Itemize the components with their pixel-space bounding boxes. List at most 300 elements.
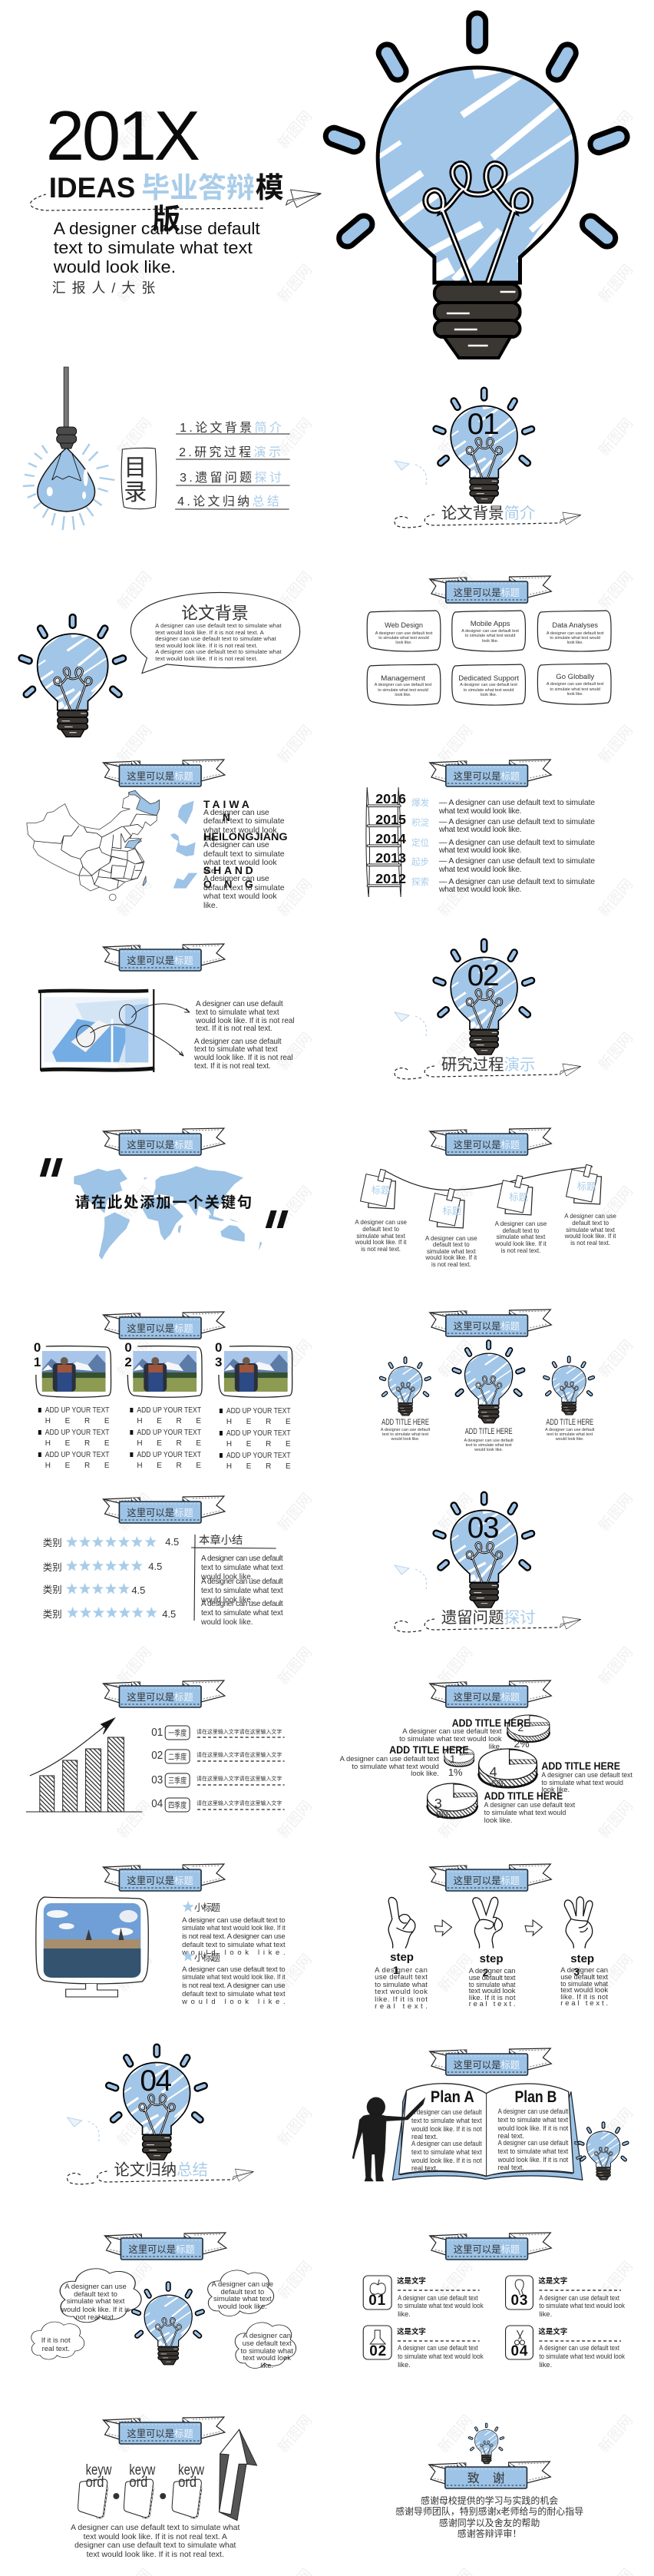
note 4: 标题	[577, 1181, 596, 1192]
icon: tiny bulb	[468, 2423, 504, 2464]
ribbon heading	[430, 576, 551, 603]
ribbon heading	[104, 1864, 225, 1891]
note text 1: A designer can use	[355, 1219, 408, 1226]
plan A text: A designer can use default	[411, 2140, 482, 2148]
region: Shandong: A designer can use	[203, 875, 269, 883]
list column 1: H E R E	[45, 1462, 110, 1470]
step 3: real text.	[560, 1999, 608, 2008]
step 1: A designer can	[375, 1966, 428, 1975]
vertical label box: 目	[124, 455, 147, 481]
rating row 2	[43, 1560, 162, 1573]
bar chart	[26, 1718, 142, 1812]
item 01: like.	[398, 2310, 411, 2319]
arrow 2	[525, 1920, 542, 1935]
step 3: text would look	[560, 1986, 608, 1995]
plan A text: would look like. If it is not	[411, 2157, 482, 2165]
card: dedicated support: look like.	[481, 693, 497, 697]
subheading 1	[183, 1901, 220, 1913]
panel: section 02	[395, 939, 581, 1079]
summary lines	[191, 1535, 276, 1621]
years: 2016	[375, 791, 406, 806]
annotation text 2: would look like. If it is not real	[193, 1054, 293, 1062]
panel: key sentence slide	[40, 1128, 289, 1260]
arrow 1	[434, 1920, 451, 1935]
ribbon heading: 这里可以是标题	[454, 1320, 520, 1332]
bubble text: text would look like. If it is not real text. A	[155, 629, 265, 636]
ribbon heading	[430, 1310, 551, 1336]
card: web design: look like.	[395, 641, 412, 645]
step 2: like. If it is not	[469, 1994, 516, 2002]
item text bottom	[484, 1790, 576, 1825]
annotation text 2: text. If it is not real text.	[194, 1062, 271, 1071]
note 1: 标题	[372, 1185, 390, 1196]
region: Taiwan: TAIWA	[203, 798, 249, 810]
card: management: to simulate what text would	[378, 688, 428, 693]
region: Heilongjiang: HEILONGJIANG	[203, 830, 288, 843]
paragraph 2: simulate what text would look like. If it	[182, 1973, 286, 1982]
years: 2013	[375, 850, 406, 866]
item 02: 02	[369, 2343, 386, 2359]
icon: small bulb	[577, 2122, 629, 2180]
plan B text: A designer can use default	[498, 2139, 569, 2147]
region: Shandong: like.	[203, 902, 218, 910]
panel: pinned notes slide	[355, 1128, 617, 1268]
note text 2: simulate what text	[427, 1248, 476, 1255]
panel: contents slide	[23, 367, 290, 530]
ribbon heading	[429, 2462, 550, 2488]
item text right	[541, 1760, 633, 1794]
thanks text: 感谢同学以及舍友的帮助	[439, 2517, 540, 2528]
photo card 3: 3	[215, 1355, 222, 1369]
subtitle: IDEAS	[49, 172, 135, 204]
list column 1: ADD UP YOUR TEXT	[45, 1451, 109, 1459]
region: Taiwan: what text would look	[203, 826, 277, 835]
item 02: to simulate what text would look	[398, 2353, 484, 2361]
ribbon heading: 这里可以是标题	[127, 1875, 193, 1886]
keyword 2: keyw	[129, 2462, 155, 2478]
photo card 2: 2	[124, 1355, 132, 1369]
photo card 3	[215, 1340, 292, 1397]
section number: 03	[467, 1511, 500, 1545]
contents list: 3.遗留问题探讨	[180, 471, 284, 485]
list column 1: ADD UP YOUR TEXT	[45, 1429, 109, 1437]
decoration: dashed flight path	[395, 461, 581, 528]
plan A text	[411, 2108, 482, 2172]
panel: ratings slide	[43, 1496, 283, 1627]
annotation text 2: text to simulate what text	[194, 1045, 278, 1054]
step 1: like. If it is not	[375, 1995, 428, 2004]
ribbon heading	[104, 1128, 225, 1155]
card: mobile apps	[452, 611, 525, 651]
framed photo	[38, 989, 154, 1072]
note text 3	[494, 1220, 547, 1254]
step 1: 1	[393, 1964, 399, 1976]
legend 03: 03	[151, 1773, 163, 1786]
bubble text: designer can use default text to simulate what	[155, 635, 277, 642]
title year: 201X	[46, 98, 200, 175]
paragraph 1: is not real text. A designer can use	[182, 1932, 286, 1941]
ribbon heading: 这里可以是标题	[454, 1139, 520, 1151]
ribbon heading	[104, 1312, 225, 1339]
cloud 3: simulate what text	[213, 2295, 272, 2303]
list column 1: H E R E	[45, 1439, 110, 1448]
bulb right with text: text to simulate what text	[547, 1432, 593, 1437]
panel: thought clouds slide	[31, 2233, 296, 2370]
note text 1: would look like. If it	[355, 1239, 407, 1246]
section title: 研究过程演示	[441, 1056, 535, 1074]
timeline text: — A designer can use default text to simulate	[439, 818, 595, 826]
card: mobile apps: to simulate what text would	[465, 634, 515, 638]
card: dedicated support: A designer can use default text	[460, 683, 517, 687]
pie 4: 6%	[491, 1778, 506, 1790]
cloud 4: use default text	[243, 2339, 292, 2348]
stage labels	[411, 797, 430, 887]
legend 04: 请在这里输入文字请在这里输入文字	[197, 1800, 282, 1806]
timeline text: what text would look like.	[438, 886, 521, 894]
photo card 1	[34, 1340, 111, 1397]
annotation text 2: A designer can use default	[194, 1038, 282, 1046]
region: Shandong: default text to simulate	[203, 884, 285, 892]
region: Taiwan: like.	[203, 835, 218, 843]
quote mark right	[266, 1210, 289, 1228]
annotation text 2	[193, 1038, 293, 1071]
item 04: to simulate what text would look	[539, 2353, 625, 2361]
legend 01: 一季度	[168, 1728, 187, 1738]
ladder	[366, 787, 401, 897]
cloud 1: A designer can use	[64, 2283, 127, 2291]
list column 2: H E R E	[137, 1462, 201, 1470]
bulb left with text: A designer can use default	[381, 1428, 431, 1432]
big arrow	[220, 2429, 257, 2521]
legend 01: 01	[151, 1726, 163, 1739]
monitor illustration	[36, 1897, 148, 1997]
rating row 1: 4.5	[165, 1536, 179, 1548]
item 04: like.	[539, 2361, 552, 2369]
icon: paper plane	[286, 190, 321, 207]
plan A text: real text.	[411, 2164, 438, 2172]
cloud 1: not real text.	[76, 2313, 116, 2322]
summary text: A designer can use default	[201, 1600, 283, 1608]
summary text: text to simulate what text	[201, 1564, 283, 1572]
keyword 2: ord	[129, 2475, 147, 2491]
ribbon heading	[104, 760, 225, 786]
bubble text: text would look like. If it is not real text.	[155, 655, 258, 662]
ribbon heading	[430, 1128, 551, 1155]
rating row 1: 类别	[43, 1538, 62, 1548]
section number: 04	[140, 2064, 172, 2098]
step 1: to simulate what	[375, 1981, 428, 1989]
summary text: text to simulate what text	[201, 1609, 283, 1617]
bubble heading: 论文背景	[181, 604, 249, 623]
note text 4	[564, 1213, 617, 1247]
subtitle wrapped character: 版	[152, 204, 180, 235]
note text 1: is not real text.	[361, 1246, 401, 1253]
ribbon heading	[430, 2048, 551, 2075]
step 3: use default text	[560, 1973, 608, 1982]
icon: bulb	[105, 2045, 208, 2160]
photo card 2: 0	[124, 1340, 132, 1355]
stage labels: 定位	[411, 837, 430, 848]
rating row 1	[43, 1536, 179, 1548]
item text top: like.	[489, 1743, 502, 1751]
decoration: dashed flight path	[68, 2117, 253, 2184]
item 01: 这是文字	[397, 2276, 426, 2286]
step 1: real text.	[375, 2002, 428, 2011]
keyword text	[71, 2524, 240, 2559]
step 2: to simulate what	[469, 1981, 516, 1989]
rating row 3	[43, 1583, 145, 1596]
step 1: step	[390, 1951, 414, 1964]
panel: plan A and B slide	[352, 2048, 629, 2181]
item 04: 这是文字	[538, 2327, 567, 2336]
plan B text: would look like. If it is not	[497, 2156, 569, 2164]
cloud 2: real text.	[42, 2345, 70, 2353]
legend 01	[151, 1726, 285, 1740]
item 01	[363, 2276, 484, 2319]
item text right: look like.	[541, 1786, 570, 1794]
note 1	[361, 1169, 395, 1209]
timeline text: — A designer can use default text to simulate	[439, 878, 595, 886]
world map	[74, 1166, 262, 1260]
bulb right with text: A designer can use default	[545, 1428, 595, 1432]
ribbon heading: 这里可以是标题	[127, 1507, 193, 1518]
vertical label box: 录	[124, 480, 147, 505]
pie 1: 1	[450, 1753, 456, 1765]
icon: large light bulb	[323, 13, 629, 358]
panel: section 01	[395, 388, 581, 528]
subheading 2: 小标题	[194, 1952, 220, 1963]
legend 04: 四季度	[168, 1800, 187, 1810]
pie 3: 3	[434, 1796, 442, 1811]
section number: 01	[467, 408, 500, 441]
step 2: A designer can	[469, 1967, 516, 1975]
region: Heilongjiang: like.	[203, 867, 218, 876]
rating row 2: 4.5	[148, 1561, 162, 1572]
photo card 1: 0	[34, 1340, 41, 1355]
step 2	[469, 1952, 516, 2008]
pie 4: 4	[490, 1764, 497, 1780]
bulb centre with text: ADD TITLE HERE	[465, 1427, 513, 1436]
summary text: would look like.	[200, 1573, 253, 1581]
cloud 4: like.	[260, 2362, 273, 2370]
timeline text: what text would look like.	[438, 866, 521, 874]
list column 1	[38, 1406, 110, 1470]
annotation text 1	[195, 1000, 295, 1033]
step 2: use default text	[469, 1974, 516, 1982]
legend 02: 二季度	[168, 1752, 187, 1762]
years: 2014	[375, 831, 406, 846]
ribbon heading	[104, 1496, 225, 1523]
step 3: step	[570, 1952, 594, 1965]
description text: A designer can use default	[54, 219, 261, 238]
step 2: step	[480, 1952, 504, 1965]
note text 4: is not real text.	[570, 1240, 610, 1247]
panel: three photos slide	[34, 1312, 292, 1471]
region: Taiwan: default text to simulate	[203, 817, 285, 826]
note 3: 标题	[509, 1192, 528, 1203]
icon: bulb	[18, 614, 127, 737]
card: dedicated support: to simulate what text would	[464, 688, 514, 693]
item 03: to simulate what text would look	[539, 2302, 625, 2310]
list column 2: ADD UP YOUR TEXT	[137, 1406, 201, 1415]
note text 4: simulate what text	[566, 1227, 616, 1233]
bulb right with text	[543, 1356, 595, 1442]
thanks text	[395, 2495, 583, 2539]
pie 2: 2%	[514, 1737, 530, 1750]
list column 3: ADD UP YOUR TEXT	[226, 1429, 291, 1438]
card: data analyses: Data Analyses	[552, 621, 598, 630]
decoration: dashed flight path	[395, 1012, 581, 1079]
bulb right with text: would look like.	[555, 1437, 584, 1442]
cloud 1: default text to	[74, 2290, 117, 2299]
years: 2015	[375, 812, 406, 827]
legend 02	[151, 1749, 285, 1763]
keyword 3: keyw	[178, 2462, 204, 2478]
ribbon heading: 这里可以是标题	[454, 2059, 520, 2071]
timeline text: what text would look like.	[438, 826, 521, 834]
note 2	[429, 1188, 464, 1228]
paragraph 1: default text to simulate what text	[182, 1941, 286, 1949]
item text right: A designer can use default text	[541, 1771, 633, 1780]
bubble text	[155, 622, 282, 662]
list column 1: H E R E	[45, 1417, 110, 1425]
ribbon heading: 这里可以是标题	[127, 2428, 193, 2439]
bubble text: text would look like. If it is not real text.	[155, 642, 258, 649]
summary text: would look like.	[200, 1596, 253, 1604]
ribbon heading: 这里可以是标题	[128, 2243, 195, 2255]
plan B heading: Plan B	[515, 2088, 557, 2106]
item 02: A designer can use default text	[398, 2344, 478, 2353]
description text: text to simulate what text	[54, 238, 253, 257]
cloud 1: would look like. If it is	[61, 2306, 130, 2314]
ribbon heading	[430, 760, 551, 786]
cloud 2: If it is not	[41, 2336, 71, 2345]
keyword 3	[172, 2462, 204, 2518]
item text bottom: A designer can use default text	[484, 1801, 576, 1809]
panel: four icons slide	[363, 2233, 625, 2369]
ribbon heading: 这里可以是标题	[127, 1323, 193, 1334]
rating row 2: 类别	[43, 1562, 62, 1573]
list column 1: ADD UP YOUR TEXT	[45, 1406, 109, 1415]
ribbon heading	[104, 2417, 225, 2444]
list column 3: H E R E	[226, 1440, 291, 1449]
item 04: A designer can use default text	[539, 2344, 619, 2353]
summary text: A designer can use default	[201, 1578, 283, 1586]
cloud 4: to simulate what	[241, 2347, 293, 2356]
panel: three steps slide	[375, 1864, 608, 2011]
ribbon heading: 致谢	[467, 2472, 517, 2485]
annotation text 1: text to simulate what text	[196, 1008, 279, 1017]
note text 1: default text to	[362, 1226, 400, 1233]
item text left: look like.	[411, 1770, 439, 1778]
ribbon heading: 这里可以是标题	[127, 955, 193, 966]
presenter: 汇报人/大张	[52, 280, 161, 296]
note text 2: is not real text.	[431, 1261, 471, 1268]
icon: bulb	[432, 939, 535, 1055]
plan B text: text to simulate what text	[498, 2116, 569, 2124]
ribbon heading: 这里可以是标题	[454, 2243, 520, 2255]
rating row 4: 4.5	[162, 1608, 176, 1620]
bulb centre with text: text to simulate what text	[466, 1443, 512, 1448]
region: Shandong: ONG	[203, 878, 253, 890]
string	[386, 1167, 593, 1190]
note text 2: default text to	[433, 1241, 470, 1248]
paragraph 2: A designer can use default text to	[182, 1965, 286, 1974]
speech bubble	[130, 592, 300, 674]
item text right: to simulate what text would	[541, 1779, 623, 1787]
ribbon heading: 这里可以是标题	[454, 587, 520, 598]
list column 3: H E R E	[226, 1462, 291, 1471]
contents list: 2.研究过程演示	[179, 445, 283, 459]
card: data analyses: A designer can use default text	[547, 631, 604, 636]
card: mobile apps: Mobile Apps	[471, 620, 510, 628]
pie 1: 1%	[448, 1766, 463, 1778]
region: Heilongjiang	[203, 830, 288, 876]
region: Shandong: SHAND	[203, 864, 253, 876]
ribbon heading: 这里可以是标题	[454, 770, 520, 782]
summary text	[200, 1555, 283, 1627]
item 03	[506, 2276, 625, 2319]
note 4	[566, 1164, 601, 1204]
quote mark left	[40, 1158, 63, 1177]
icon: hanging bulb	[23, 367, 114, 530]
panel: timeline ladder slide	[366, 760, 595, 897]
panel: thanks slide	[395, 2423, 583, 2539]
subtitle: 模	[256, 172, 284, 204]
description text	[53, 219, 261, 276]
card: web design: Web Design	[385, 621, 423, 630]
panel: pie charts slide	[340, 1680, 633, 1825]
item 03: A designer can use default text	[539, 2294, 619, 2303]
note text 4: default text to	[572, 1220, 609, 1227]
panel: speech bubble slide	[18, 592, 300, 737]
bulb right with text: ADD TITLE HERE	[546, 1418, 593, 1427]
summary text: A designer can use default	[201, 1555, 283, 1563]
item text right: ADD TITLE HERE	[541, 1760, 620, 1772]
cloud 3: A designer can use	[212, 2280, 273, 2289]
paragraph 1	[181, 1916, 286, 1957]
note text 1	[355, 1219, 408, 1253]
pie 3: 8%	[436, 1809, 451, 1820]
cloud 4	[235, 2323, 296, 2370]
photo card 3: 0	[215, 1340, 222, 1355]
step 2: 2	[483, 1966, 489, 1978]
bulb centre with text: would look like.	[474, 1448, 504, 1452]
pie 1	[444, 1747, 474, 1778]
timeline text: — A designer can use default text to simulate	[439, 839, 595, 847]
paragraph 2	[181, 1965, 286, 2006]
item 02: like.	[398, 2361, 411, 2369]
item text left: A designer can use default text	[340, 1755, 439, 1763]
annotation text 1: A designer can use default	[196, 1000, 283, 1008]
timeline text: — A designer can use default text to simulate	[439, 857, 595, 866]
card: dedicated support	[452, 664, 525, 705]
step 1: use default text	[375, 1973, 428, 1982]
item text left: to simulate what text would	[352, 1763, 439, 1771]
note text 3: simulate what text	[497, 1233, 546, 1240]
thanks text: 感谢答辩评审！	[457, 2528, 521, 2539]
list column 3	[220, 1407, 291, 1471]
stage labels: 探索	[411, 876, 429, 887]
rating row 3: 4.5	[131, 1584, 145, 1596]
stage labels: 积淀	[411, 817, 430, 828]
note text 2: would look like. If it	[424, 1254, 477, 1261]
annotation text 1: would look like. If it is not real	[195, 1017, 295, 1025]
plan B text	[497, 2107, 569, 2171]
keyword 1: keyw	[86, 2462, 112, 2478]
years: 2012	[375, 871, 406, 886]
item 02	[363, 2326, 484, 2369]
